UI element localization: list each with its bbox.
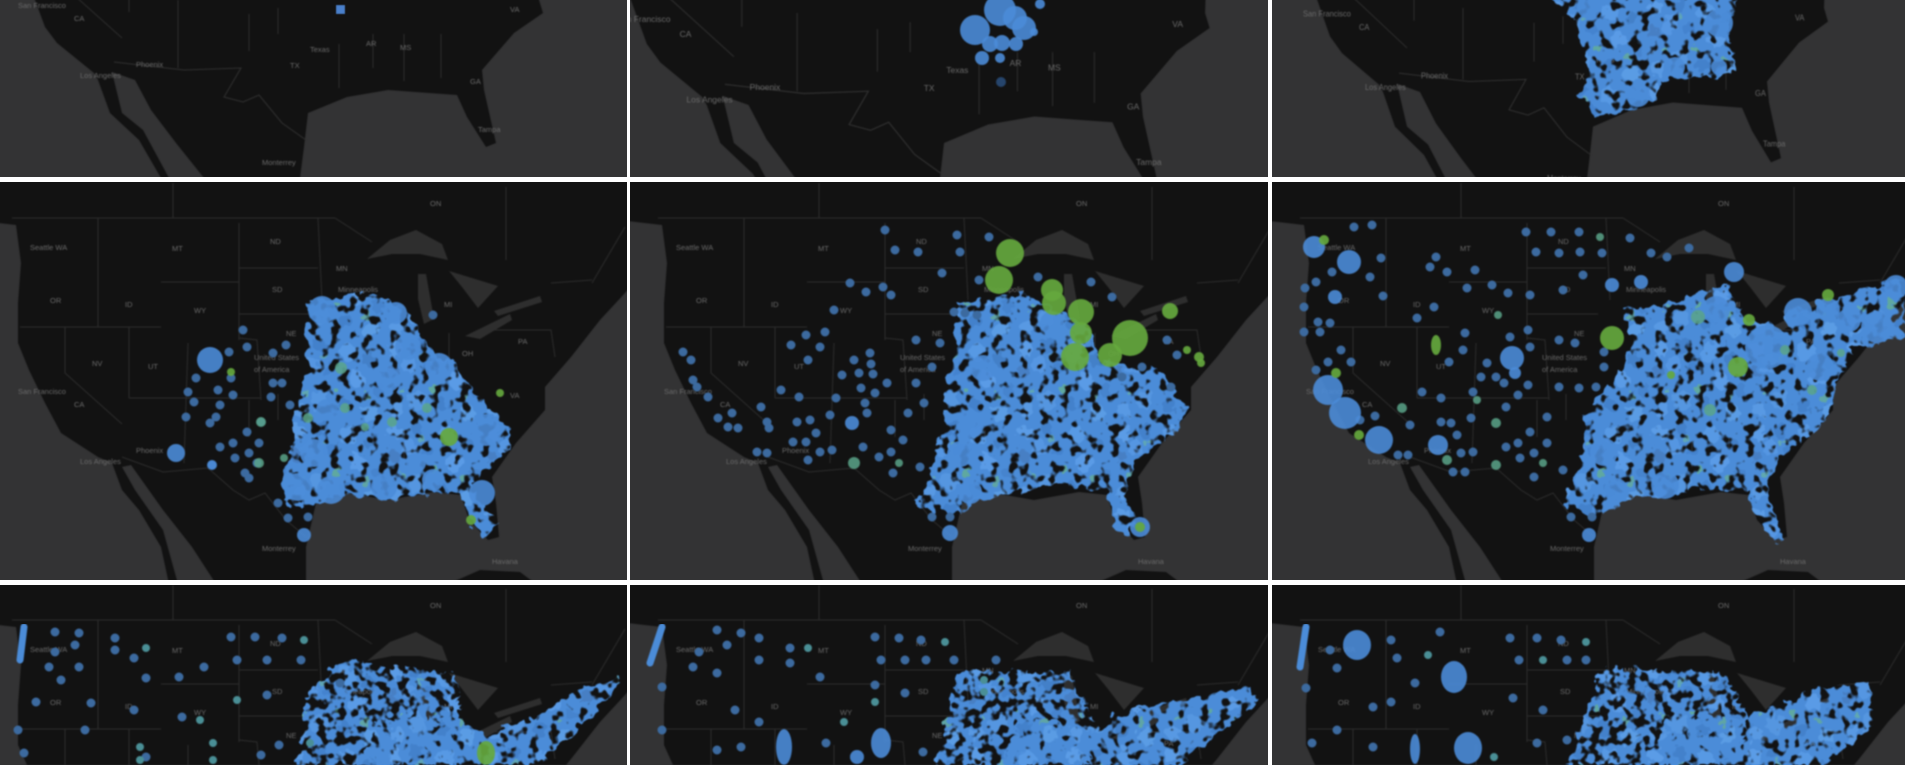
bubbles: coast-to-coast blue and green: [1303, 225, 1905, 543]
bubbles: nationwide blue with large green Midwest circles: [683, 230, 1205, 541]
panel: row 3 column 1: [0, 585, 627, 765]
bubbles: southeast concentration: [167, 293, 510, 542]
bubbles: eastern blue mass and sparse west: [1300, 627, 1871, 765]
panel: row 2 column 3: [1272, 182, 1905, 580]
bubbles: eastern blue mass and sparse west: [650, 627, 1258, 765]
bubbles: eastern blue mass and sparse west: [18, 627, 620, 765]
panel: row 2 column 2: [630, 182, 1268, 580]
first blue bubble: [336, 5, 345, 14]
blue bubble cluster over the central plains: [960, 0, 1045, 87]
panel: row 1 column 2: [630, 0, 1268, 177]
panel: row 3 column 2: [630, 585, 1268, 765]
panel: row 1 column 3: [1272, 0, 1905, 195]
blue bubble mass spreading down the Mississippi: [1549, 0, 1736, 117]
panel: row 1 column 1: [0, 0, 627, 178]
panel: row 2 column 1: [0, 182, 627, 580]
panel: row 3 column 3: [1272, 585, 1905, 765]
